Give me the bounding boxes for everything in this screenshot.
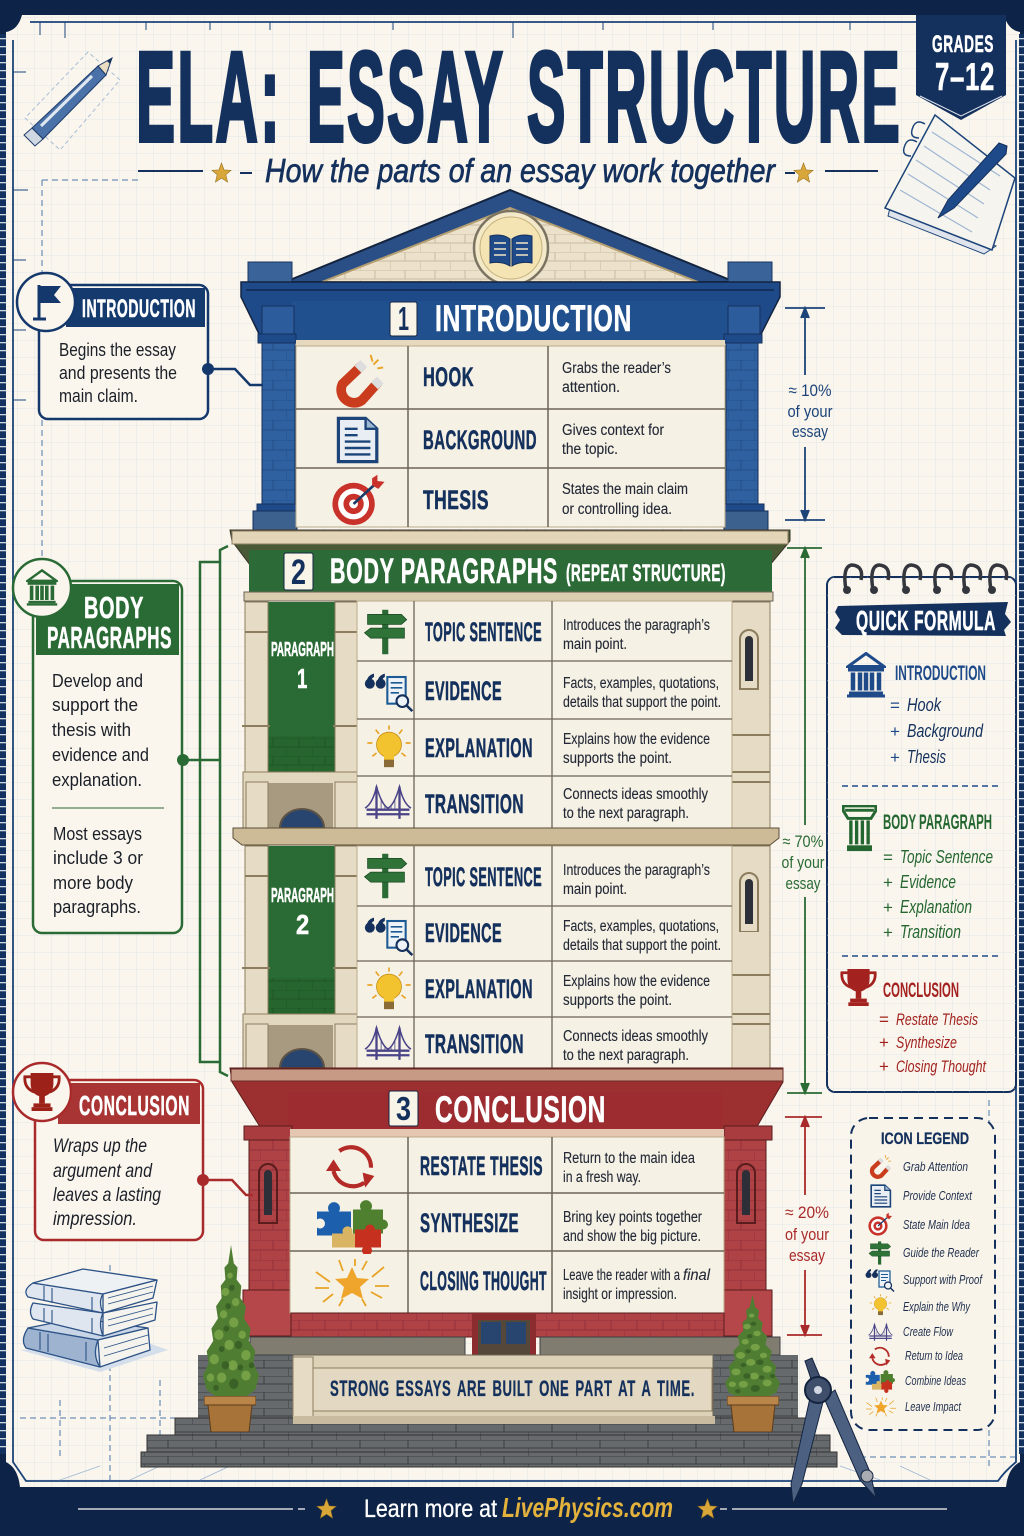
number box 2: 2 [291, 553, 306, 592]
row: hook [341, 355, 671, 403]
legend items [866, 1155, 983, 1416]
formula: body paragraph: + [883, 873, 893, 892]
row: background [338, 418, 664, 462]
formula: conclusion [842, 969, 987, 1076]
row: evidence: Facts, examples, quotations, [563, 675, 719, 692]
row: background: the topic. [562, 441, 618, 458]
connector [208, 369, 263, 385]
callout: introduction: main claim. [59, 386, 138, 406]
formula: body paragraph: + [883, 898, 893, 917]
formula: conclusion: = [879, 1010, 889, 1029]
formula: introduction: Background [907, 721, 984, 741]
legend items: Explain the Why [903, 1300, 971, 1314]
row: closing thought: final [683, 1267, 711, 1284]
row: explanation [367, 726, 710, 767]
callout: introduction [17, 273, 263, 419]
callout: body paragraphs: explanation. [52, 770, 142, 790]
row: topic sentence: TOPIC SENTENCE [425, 617, 542, 647]
row: transition: Connects ideas smoothly [563, 786, 708, 803]
row: closing thought [315, 1259, 711, 1306]
row: evidence [365, 918, 721, 955]
paragraph 1 facade: PARAGRAPH [271, 639, 334, 661]
row: explanation: Explains how the evidence [563, 731, 710, 748]
row: thesis [332, 475, 688, 525]
legend items: Combine Ideas [905, 1374, 966, 1388]
callout: introduction: and presents the [59, 363, 177, 383]
dimension: 70 percent: ≈ 70% [782, 832, 824, 851]
table: paragraph 2 [357, 846, 732, 1068]
cornice [230, 1068, 783, 1130]
row: topic sentence: Introduces the paragraph’s [563, 862, 710, 879]
paragraph 2 facade [242, 846, 770, 1068]
dimension: 20 percent: essay [789, 1246, 825, 1265]
table: paragraph 1 [357, 601, 732, 828]
callout: introduction: INTRODUCTION [82, 295, 196, 323]
row: thesis: States the main claim [562, 481, 688, 498]
row: topic sentence: main point. [563, 881, 627, 898]
formula: body paragraph: Explanation [900, 897, 972, 917]
dimension: 20 percent: ≈ 20% [785, 1203, 829, 1222]
dimension: 10 percent: ≈ 10% [788, 381, 832, 400]
section title: CONCLUSION [435, 1089, 606, 1130]
row: transition: TRANSITION [425, 789, 524, 819]
icon: drafting compass [791, 1358, 876, 1504]
row: explanation: supports the point. [563, 750, 672, 767]
legend items: Create Flow [903, 1325, 954, 1339]
callout: conclusion: CONCLUSION [79, 1090, 190, 1121]
stone steps [141, 1337, 837, 1467]
icon: sketched books [20, 1269, 168, 1372]
dimension: 10 percent: essay [792, 422, 828, 441]
row: transition [365, 786, 708, 822]
planter: right tree [725, 1295, 780, 1432]
dimension: 70 percent: of your [782, 853, 825, 872]
row: synthesize [317, 1200, 702, 1256]
icon: pencil sketch [24, 52, 120, 150]
legend items: Guide the Reader [903, 1246, 980, 1260]
row: closing thought: Leave the reader with a [563, 1267, 680, 1284]
callout: body paragraphs: support the [52, 695, 138, 715]
footer [0, 1487, 1024, 1536]
section title: INTRODUCTION [435, 298, 632, 339]
row: explanation [367, 968, 710, 1009]
mid cornice [233, 828, 779, 845]
title [136, 26, 902, 169]
band [288, 1092, 722, 1129]
formula: conclusion: CONCLUSION [883, 979, 959, 1002]
legend items: Support with Proof [903, 1273, 983, 1287]
band [249, 550, 772, 592]
number box 2 [284, 553, 313, 592]
paragraph 1 facade: 1 [297, 663, 308, 694]
dimension: 20 percent: of your [785, 1225, 829, 1244]
row: synthesize: SYNTHESIZE [420, 1208, 519, 1238]
cornice [241, 282, 780, 340]
icon: temple [13, 559, 71, 617]
badge: grades: 7–12 [935, 56, 995, 99]
row: evidence: EVIDENCE [425, 676, 502, 706]
callout: body paragraphs: PARAGRAPHS [47, 620, 172, 655]
formula: body paragraph [843, 806, 993, 942]
panel: icon legend [851, 1118, 995, 1430]
row: explanation: Explains how the evidence [563, 973, 710, 990]
row: restate thesis: in a fresh way. [563, 1169, 641, 1186]
spiral rings [845, 565, 1007, 590]
legend items: State Main Idea [903, 1218, 970, 1232]
formula: introduction: = [890, 696, 900, 715]
formula: introduction [847, 654, 986, 767]
panel: icon legend: ICON LEGEND [881, 1129, 969, 1148]
icon: notebook and pen [885, 115, 1015, 254]
sign: closing motto [293, 1355, 715, 1424]
row: topic sentence [365, 610, 710, 654]
formula: conclusion: Synthesize [896, 1033, 957, 1052]
columns [243, 1126, 772, 1336]
medallion: open book [474, 211, 548, 285]
row: topic sentence: main point. [563, 636, 627, 653]
subtitle ornaments [138, 163, 878, 182]
number box 3: 3 [396, 1090, 411, 1127]
row: synthesize: and show the big picture. [563, 1228, 701, 1245]
row: evidence [365, 674, 721, 711]
number box 3 [389, 1090, 418, 1127]
formula: body paragraph: = [883, 848, 893, 867]
section 2: body paragraphs building: (REPEAT STRUCTURE) [566, 560, 726, 587]
connector [203, 1180, 253, 1195]
row: thesis: or controlling idea. [562, 501, 672, 518]
paragraph 1 facade [242, 602, 770, 828]
title: ESSAY [307, 26, 505, 169]
legend items: Leave Impact [905, 1400, 961, 1414]
formula: introduction: + [890, 748, 900, 767]
formula: introduction: Hook [907, 695, 942, 715]
formula: introduction: Thesis [907, 747, 946, 767]
badge: grades [916, 15, 1006, 120]
callout: conclusion: leaves a lasting [53, 1185, 161, 1206]
row: transition: TRANSITION [425, 1029, 524, 1059]
paragraph 2 facade: 2 [296, 909, 310, 940]
callout: body paragraphs [13, 546, 228, 1076]
formula: body paragraph: Evidence [900, 872, 956, 892]
brick base [291, 1313, 724, 1337]
number box 1: 1 [398, 300, 409, 337]
footer: LivePhysics.com [502, 1492, 673, 1523]
row: closing thought: CLOSING THOUGHT [420, 1266, 547, 1296]
section 3: conclusion building [230, 1068, 783, 1355]
door [478, 1320, 530, 1355]
table: introduction rows [296, 346, 725, 527]
band [292, 301, 728, 340]
row: topic sentence: Introduces the paragraph’s [563, 617, 710, 634]
section 1: introduction building [241, 282, 780, 530]
row: synthesize: Bring key points together [563, 1209, 702, 1226]
formula: conclusion: Closing Thought [896, 1057, 987, 1076]
title: ELA: [136, 26, 282, 169]
callout: body paragraphs: include 3 or [53, 848, 143, 868]
callout: body paragraphs: Most essays [53, 824, 142, 844]
dimension: 70 percent: essay [786, 874, 821, 893]
number box 1 [390, 300, 417, 337]
legend items: Return to Idea [905, 1349, 963, 1363]
section title: BODY PARAGRAPHS [330, 552, 558, 591]
formula: body paragraph: Topic Sentence [900, 847, 993, 867]
pediment roof [248, 190, 772, 285]
dimension: 70 percent [782, 548, 825, 1093]
row: transition: to the next paragraph. [563, 1047, 689, 1064]
dimension: 20 percent [785, 1117, 829, 1335]
legend items: Provide Context [903, 1189, 972, 1203]
row: evidence: EVIDENCE [425, 918, 502, 948]
row: evidence: details that support the point. [563, 937, 721, 954]
icon: flag [17, 273, 75, 331]
callout: introduction: Begins the essay [59, 340, 176, 360]
table: conclusion rows [290, 1137, 724, 1313]
row: hook: HOOK [423, 362, 474, 392]
legend items: Grab Attention [903, 1160, 968, 1174]
row: closing thought: insight or impression. [563, 1286, 677, 1303]
formula: body paragraph: + [883, 923, 893, 942]
footer: Learn more at [364, 1495, 497, 1523]
callout: body paragraphs: more body [53, 873, 133, 893]
callout: conclusion: argument and [53, 1161, 153, 1182]
bracket connector [182, 546, 228, 1076]
row: evidence: details that support the point. [563, 694, 721, 711]
row: restate thesis [326, 1147, 695, 1188]
section 2: body paragraphs building [230, 530, 790, 1068]
dimension: 10 percent: of your [788, 402, 833, 421]
callout: body paragraphs: BODY [84, 590, 144, 625]
icon: trophy [13, 1063, 71, 1121]
dimension: 10 percent [785, 308, 833, 520]
row: restate thesis: RESTATE THESIS [420, 1151, 543, 1181]
row: transition: Connects ideas smoothly [563, 1028, 708, 1045]
callout: conclusion: impression. [53, 1209, 137, 1230]
cornice [230, 530, 790, 565]
row: topic sentence [365, 854, 710, 898]
row: explanation: EXPLANATION [425, 733, 533, 763]
row: background: BACKGROUND [423, 425, 537, 455]
row: explanation: EXPLANATION [425, 974, 533, 1004]
row: topic sentence: TOPIC SENTENCE [425, 862, 542, 892]
formula: conclusion: Restate Thesis [896, 1010, 978, 1029]
formula: conclusion: + [879, 1033, 889, 1052]
callout: conclusion: Wraps up the [53, 1136, 147, 1157]
banner [835, 602, 1011, 636]
row: explanation: supports the point. [563, 992, 672, 1009]
columns [253, 306, 768, 530]
planter: left tree [203, 1245, 259, 1432]
row: evidence: Facts, examples, quotations, [563, 918, 719, 935]
callout: body paragraphs: paragraphs. [53, 897, 141, 917]
callout: body paragraphs: Develop and [52, 671, 143, 691]
row: hook: attention. [562, 379, 620, 396]
row: thesis: THESIS [423, 485, 489, 515]
subtitle: How the parts of an essay work together [265, 152, 777, 189]
formula: conclusion: + [879, 1057, 889, 1076]
callout: conclusion [13, 1063, 253, 1240]
callout: body paragraphs: evidence and [52, 745, 149, 765]
formula: body paragraph: Transition [900, 922, 961, 942]
paragraph 2 facade: PARAGRAPH [271, 885, 334, 907]
row: restate thesis: Return to the main idea [563, 1150, 695, 1167]
panel: quick formula [827, 565, 1016, 1092]
row: transition [365, 1028, 708, 1064]
sign: closing motto: STRONG ESSAYS ARE BUILT ONE PART AT A TIME. [330, 1376, 695, 1401]
row: transition: to the next paragraph. [563, 805, 689, 822]
callout: body paragraphs: thesis with [52, 720, 131, 740]
row: hook: Grabs the reader’s [562, 360, 671, 377]
row: background: Gives context for [562, 422, 664, 439]
formula: introduction: + [890, 722, 900, 741]
